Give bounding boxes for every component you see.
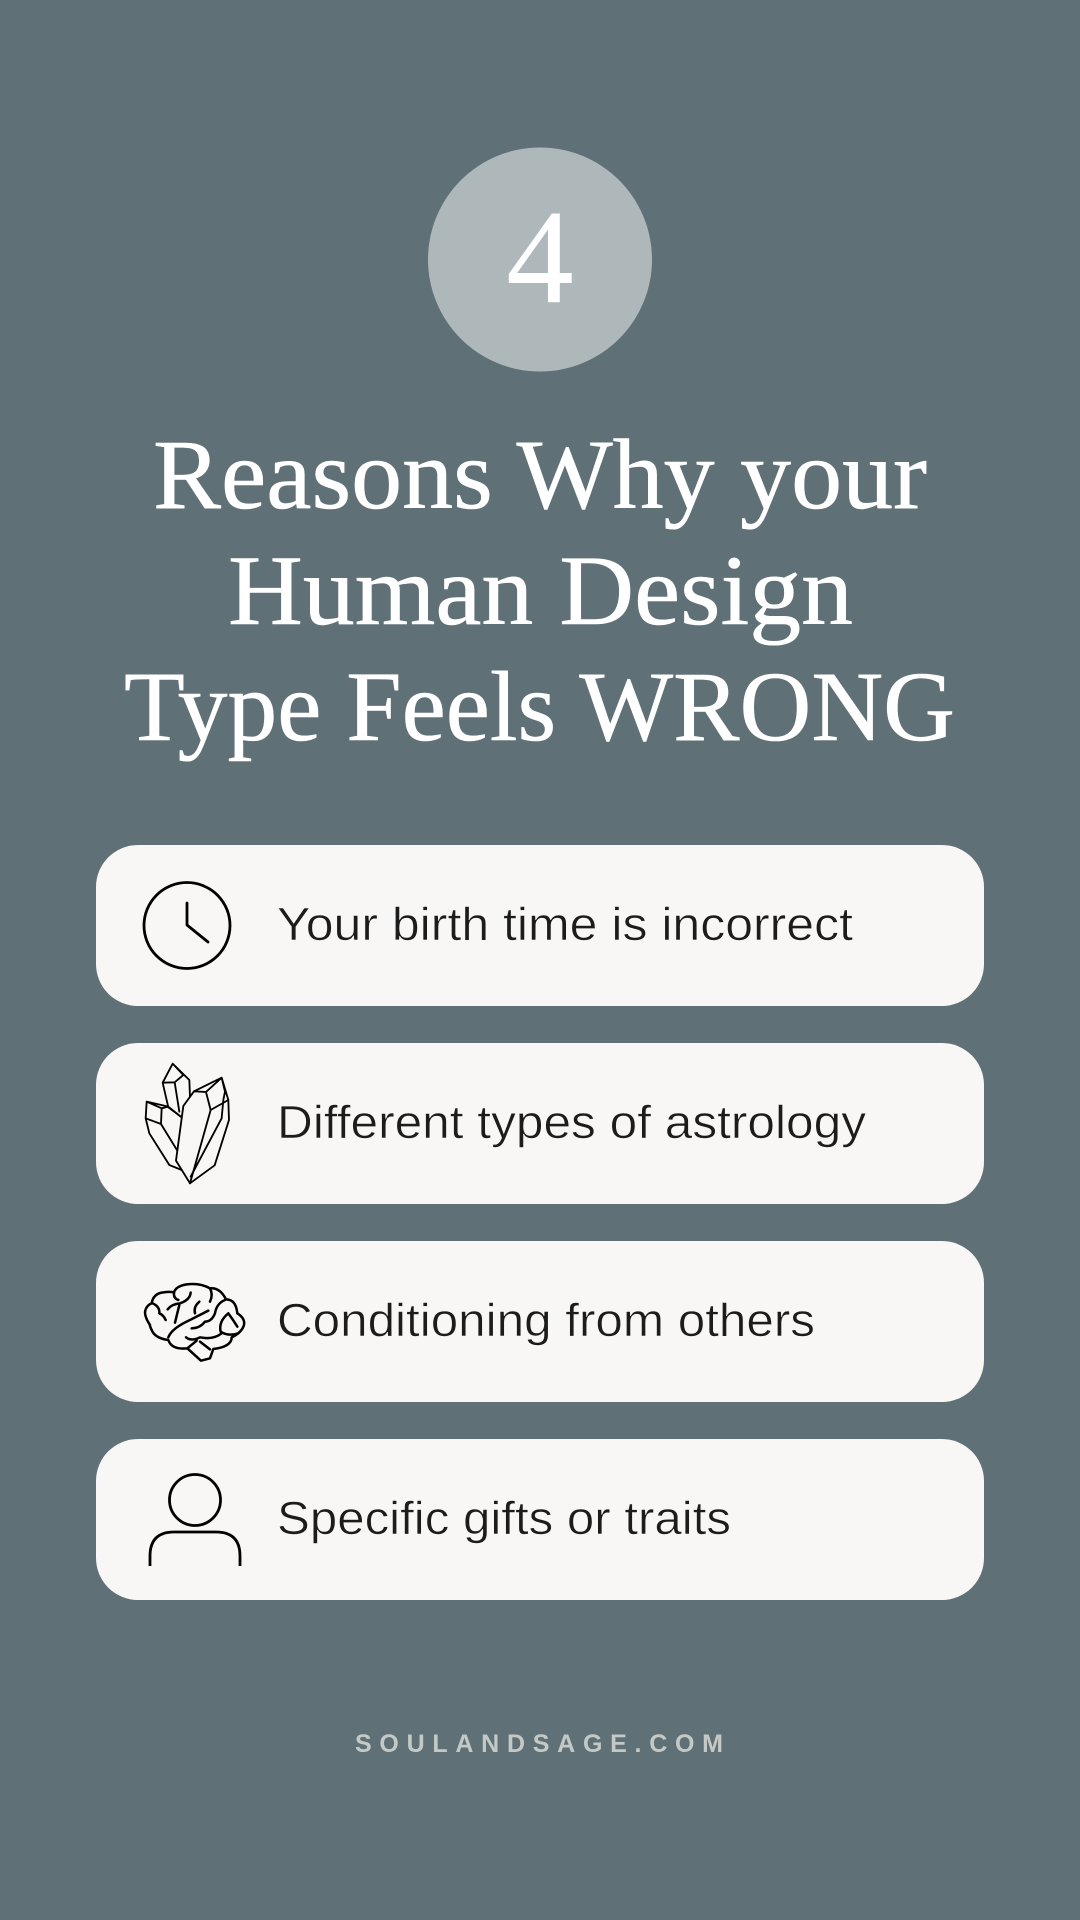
panel: gifts (96, 1439, 984, 1600)
icon: brain (145, 1284, 244, 1361)
panel: conditioning (96, 1241, 984, 1402)
text: conditioning: Conditioning from others (277, 1294, 815, 1346)
number badge: 4 (506, 183, 574, 331)
text: astrology: Different types of astrology (277, 1096, 866, 1148)
text: birth time: Your birth time is incorrect (277, 898, 853, 950)
title: Type Feels WRONG (124, 651, 955, 762)
text: gifts: Specific gifts or traits (277, 1492, 731, 1544)
title: Reasons Why your (153, 419, 927, 530)
footer website: SOULANDSAGE.COM (355, 1730, 723, 1758)
panel: astrology (96, 1043, 984, 1204)
icon: crystal (146, 1064, 229, 1183)
title (124, 419, 955, 762)
icon: clock (144, 882, 230, 968)
panel: birth time (96, 845, 984, 1006)
icon: person (150, 1474, 240, 1566)
title: Human Design (228, 535, 853, 646)
number badge (428, 148, 652, 372)
